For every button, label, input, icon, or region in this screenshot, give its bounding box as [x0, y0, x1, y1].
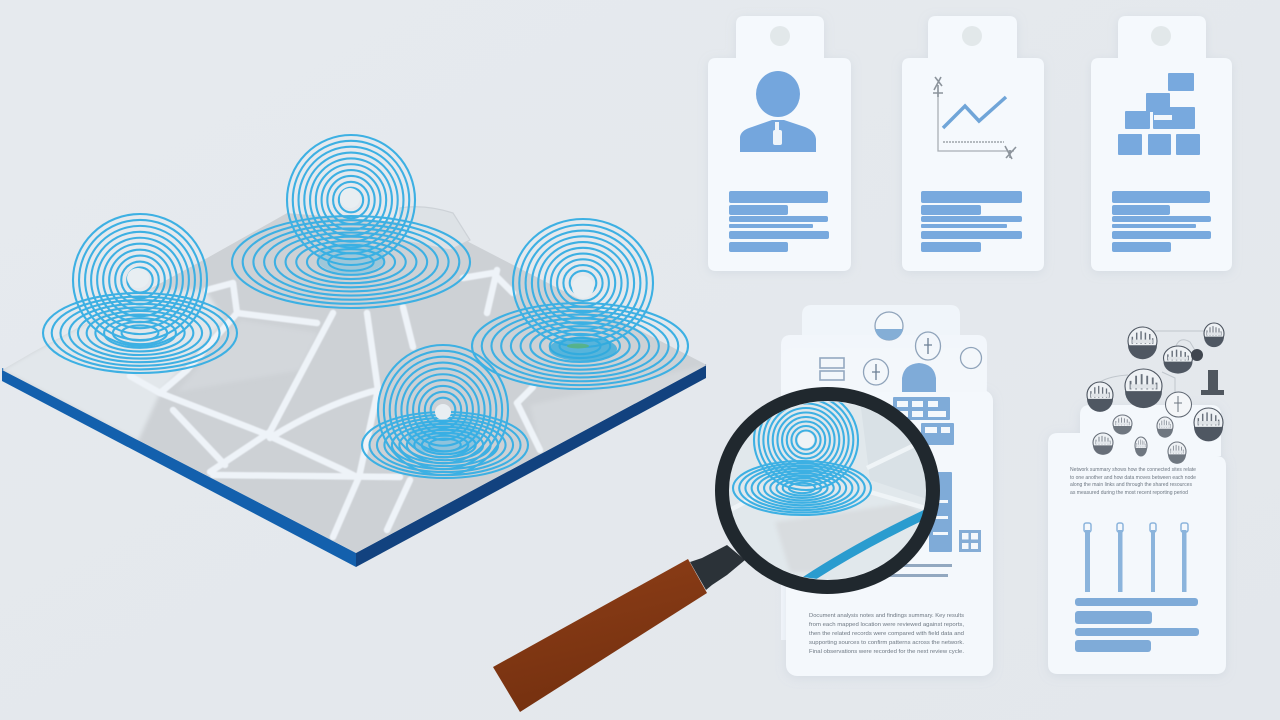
card body [1091, 16, 1232, 271]
hole [1151, 26, 1171, 46]
node [1204, 323, 1224, 347]
icon: circle figure left [864, 359, 888, 385]
icon: grids [893, 397, 954, 552]
node [1125, 369, 1162, 408]
isometric map platform [2, 207, 707, 567]
target rings: top centre [232, 135, 470, 308]
document paragraph: Final observations were recorded for the next review cycle. [809, 649, 964, 655]
card body [708, 16, 851, 271]
card: line chart [902, 16, 1044, 271]
icon: circle figure right [960, 348, 982, 368]
node: tower [1201, 370, 1224, 395]
collar [690, 545, 745, 590]
back sheet [802, 305, 960, 360]
document paragraph: supporting sources to confirm patterns across the network. [809, 640, 964, 646]
node [1164, 346, 1192, 374]
document paragraph: along the main links and through the shared resources [1070, 482, 1192, 488]
node [1135, 437, 1147, 457]
horizontal bars [1075, 598, 1199, 652]
node [1168, 442, 1186, 464]
target rings: left [43, 214, 237, 373]
platform right edge [356, 364, 706, 567]
document paragraph: Document analysis notes and findings summary. Key results [809, 613, 964, 619]
rule lines [889, 564, 952, 577]
front sheet [786, 390, 993, 676]
network document [1048, 323, 1226, 674]
document sheet [1048, 405, 1226, 674]
text bars [921, 191, 1022, 252]
icon: line chart [933, 77, 1016, 159]
vertical bar chart [1084, 523, 1188, 592]
lens rim [722, 394, 933, 587]
icon: person [740, 71, 816, 152]
node [1093, 433, 1113, 455]
hole [770, 26, 790, 46]
node [1166, 392, 1192, 417]
text bars [1112, 191, 1211, 252]
surface outline bump [400, 207, 470, 250]
lens contents [731, 402, 926, 580]
magnifying glass [493, 387, 940, 712]
node [1191, 349, 1203, 361]
card: person [708, 16, 851, 271]
handle [493, 559, 707, 712]
node [1128, 327, 1157, 359]
card: blocks [1091, 16, 1232, 271]
document paragraph: Network summary shows how the connected sites relate [1070, 467, 1196, 473]
document icons [820, 312, 982, 577]
node [1113, 415, 1132, 435]
document paragraph: from each mapped location were reviewed against reports, [809, 622, 964, 628]
node [1194, 408, 1223, 441]
document paragraph: to one another and how data moves between each node [1070, 475, 1196, 481]
document paragraph: then the related records were compared with field data and [809, 631, 964, 637]
document paragraph [1070, 467, 1196, 496]
document paragraph [809, 613, 964, 655]
document paragraph: as measured during the most recent reporting period [1070, 490, 1188, 496]
hole [962, 26, 982, 46]
map surface [2, 213, 707, 553]
text bars [729, 191, 829, 252]
icon: stacked blocks [1118, 73, 1200, 155]
icon: pot [875, 312, 903, 340]
icon: circle figure top [916, 332, 940, 360]
network diagram [1087, 323, 1224, 464]
target rings: bottom centre [362, 345, 528, 478]
card body [902, 16, 1044, 271]
icon: window grid [959, 530, 981, 552]
node [1087, 382, 1113, 412]
node [1157, 417, 1173, 438]
target rings: right [472, 219, 688, 389]
platform left edge [2, 368, 356, 567]
document stack [781, 305, 993, 676]
icon: rack [820, 358, 844, 380]
middle sheet [781, 335, 987, 640]
icon: dome [902, 363, 936, 392]
